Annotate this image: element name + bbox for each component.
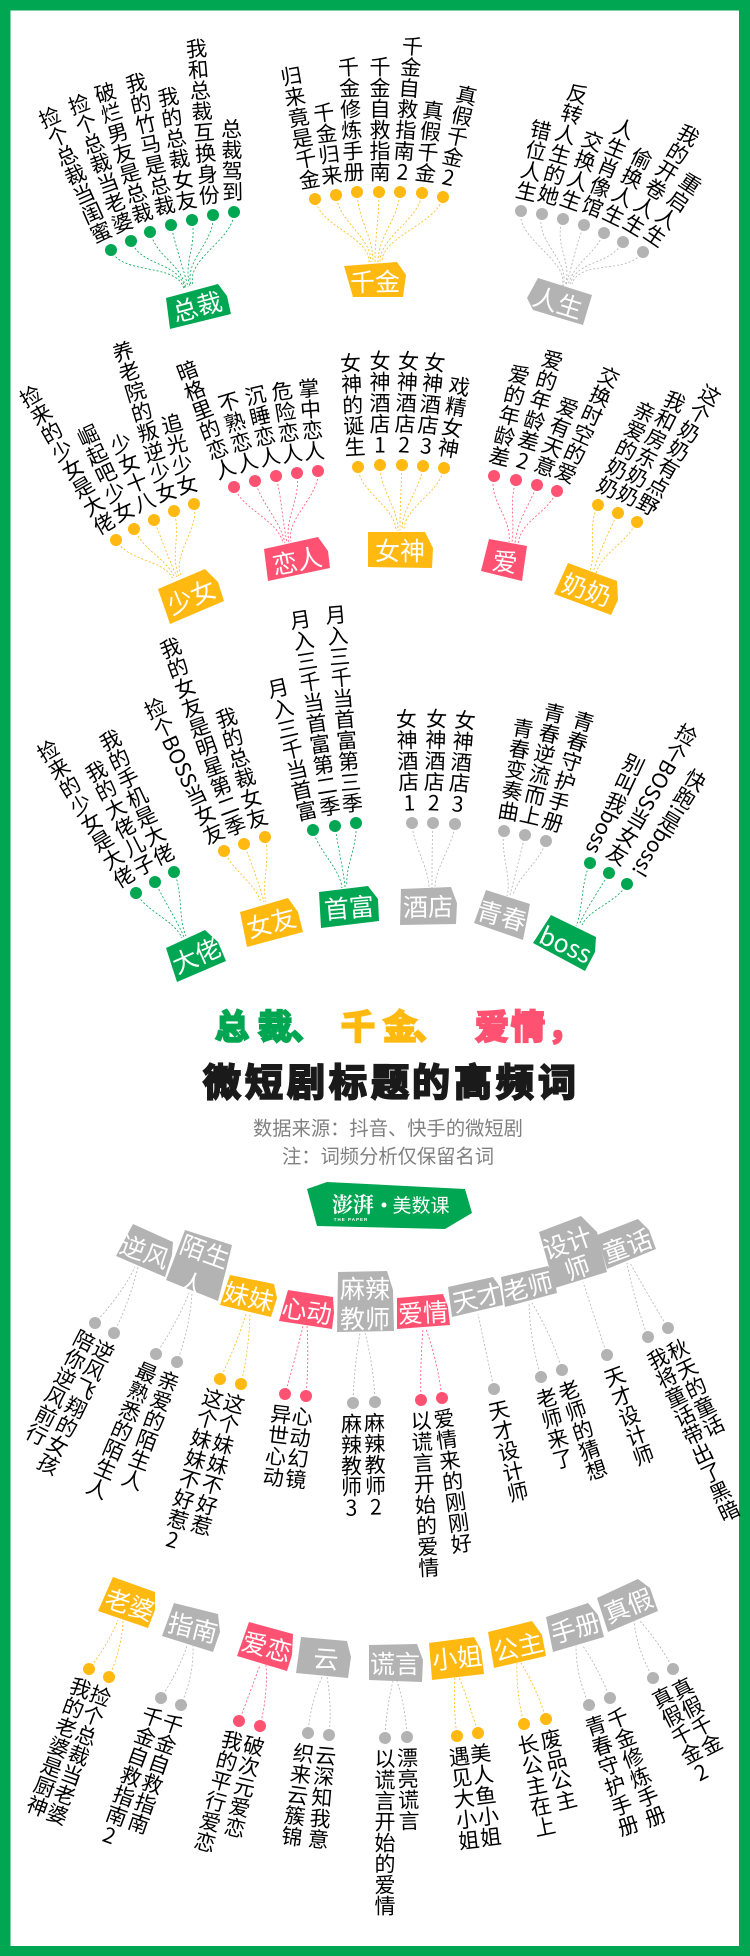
dots: 人生: [515, 205, 649, 258]
titles: 少女: 养老院的叛逆少女: [106, 337, 184, 507]
titles: 奶奶: 这个奶奶有点野: [630, 378, 728, 522]
titles: 爱情: [406, 1406, 478, 1579]
cluster: 设计师: [537, 1216, 661, 1471]
titles: 女神: 女神酒店1: [365, 350, 395, 455]
connectors: 手册: [576, 1646, 610, 1705]
tag: 天才: 天才: [449, 1274, 505, 1320]
cluster: 公主: [488, 1621, 583, 1840]
connectors: 小姐: [454, 1677, 478, 1736]
titles: 爱: 爱的年龄差2: [505, 346, 570, 475]
titles: 女友: 捡个BOSS当女友: [137, 692, 232, 850]
tag: 童话: 童话: [597, 1220, 657, 1270]
titles: 女神: 女神酒店3: [410, 350, 451, 458]
cluster: 谎言: [369, 1644, 424, 1916]
titles: 首富: 月入三千当首富第三季: [320, 603, 368, 815]
cluster: 老师: [499, 1262, 614, 1485]
titles: 恋人: 危险恋人: [266, 378, 308, 466]
titles: 酒店: 女神酒店2: [418, 708, 452, 814]
titles: 真假: 真假千金: [665, 1672, 729, 1760]
title line 1: 总裁、: [215, 1000, 324, 1049]
cluster: 青春: [473, 699, 601, 940]
data source note: 数据来源：抖音、快手的微短剧: [253, 1113, 523, 1141]
titles: 手册: 青春守护手册: [578, 1711, 646, 1840]
dots: 大佬: [130, 866, 180, 899]
titles: 童话: 秋天的童话: [660, 1333, 732, 1442]
tag: 爱: 爱: [490, 541, 520, 581]
tag: 真假: 真假: [598, 1579, 658, 1631]
titles: 爱: 交换时空的爱: [548, 361, 627, 489]
cluster: 天才: [448, 1274, 535, 1506]
titles: 爱恋: 破次元爱恋: [218, 1732, 271, 1842]
titles: 千金: 千金归来: [308, 100, 348, 188]
titles: 大佬: 我的大佬儿子: [78, 755, 162, 881]
cluster: 恋人: [169, 355, 330, 582]
titles: 千金: 真假千金: [409, 98, 449, 185]
titles: 女神: 戏精女神: [432, 373, 476, 461]
dots: 谎言: [379, 1731, 413, 1744]
titles: 青春: [492, 699, 601, 837]
titles: 云: [276, 1741, 342, 1851]
tag: 青春: 青春: [473, 891, 531, 939]
dots: 爱情: [415, 1392, 448, 1406]
connectors: 麻辣教师: [353, 1333, 375, 1403]
titles: 女神: 女神的诞生: [335, 351, 370, 458]
connector: 设计师: [583, 1282, 607, 1355]
titles: 爱情: 爱情来的刚刚好: [428, 1406, 478, 1556]
connector: 天才: [478, 1314, 494, 1389]
cluster: boss: [533, 718, 714, 971]
titles: 老婆: 我的老婆是厨神: [20, 1673, 98, 1822]
title line 1: 爱情，: [475, 1000, 582, 1049]
titles: 逆风: 陪你逆风前行: [18, 1324, 102, 1451]
cluster: 爱: [481, 346, 627, 581]
connectors: 陌生人: [156, 1293, 192, 1362]
dot: 设计师: [601, 1349, 613, 1361]
tag: 小姐: 小姐: [430, 1636, 484, 1678]
titles: 云: 云深知我意: [302, 1744, 342, 1851]
titles: 恋人: [169, 355, 330, 484]
tag: 老师: 老师: [499, 1262, 557, 1310]
titles: 千金: 真假千金2: [431, 82, 484, 191]
tag: 谎言: 谎言: [370, 1645, 420, 1681]
logo: 澎湃·美数课: ·: [374, 1191, 394, 1218]
tag: 女神: 女神: [375, 532, 425, 568]
connectors: 总裁: [111, 212, 234, 289]
cluster: 陌生人: [79, 1226, 235, 1504]
titles: 人生: 人生肖像馆: [575, 113, 642, 222]
dots: 恋人: [228, 465, 324, 493]
dots: 女友: [218, 831, 271, 857]
tag: 大佬: 大佬: [166, 928, 226, 982]
tag: 麻辣教师: [337, 1270, 394, 1336]
titles: 人生: 反转人生的她: [531, 79, 595, 209]
tag: 恋人: 恋人: [269, 538, 325, 582]
connectors: 爱恋: [239, 1665, 266, 1726]
titles: 女友: [137, 633, 275, 850]
titles: 恋人: 沉睡恋人: [238, 381, 286, 470]
dots: 爱恋: [233, 1715, 266, 1732]
titles: 酒店: 女神酒店1: [391, 708, 425, 814]
titles: 总裁: 破烂男友是总裁: [88, 78, 160, 228]
cluster: 小姐: [429, 1636, 507, 1852]
dots: 小姐: [451, 1727, 484, 1742]
titles: 人生: 我的开卷人生: [616, 118, 707, 242]
titles: 总裁: 捡个总裁当闺蜜: [32, 101, 119, 248]
connectors: 千金: [315, 192, 443, 262]
cluster: 千金: [275, 34, 484, 299]
dots: 老婆: [83, 1663, 115, 1683]
tag: 陌生人: 陌生: [175, 1226, 235, 1276]
titles: 童话: 我将童话带出了黑暗: [640, 1342, 747, 1527]
titles: 总裁: 我和总裁互换身份: [181, 37, 225, 207]
cluster: 总裁: [32, 37, 248, 330]
titles: 恋人: 掌中恋人: [293, 376, 330, 463]
logo: 澎湃·美数课: 澎湃: [332, 1189, 374, 1219]
titles: 首富: 月入三千当首富: [261, 674, 324, 825]
titles: 心动: [257, 1402, 318, 1491]
data source note: [253, 1113, 523, 1169]
titles: 大佬: 我的手机是大佬: [92, 724, 182, 871]
titles: 麻辣教师: 麻辣教师2: [359, 1412, 391, 1517]
tag: 千金: 千金: [350, 263, 400, 299]
cluster: 真假: [597, 1579, 729, 1788]
dots: 酒店: [406, 817, 461, 830]
connectors: 心动: [285, 1326, 308, 1396]
cluster: 爱恋: [188, 1622, 296, 1856]
connectors: 老婆: [89, 1620, 123, 1677]
connectors: 奶奶: [590, 505, 637, 573]
tag: 爱: [481, 539, 527, 581]
titles: 青春: 青春逆流而上: [514, 699, 571, 829]
connectors: 指南: [161, 1646, 193, 1705]
connectors: 酒店: [412, 823, 455, 888]
cluster: 童话: [597, 1219, 747, 1527]
connectors: 爱: [493, 476, 557, 544]
title line 1: 千金、: [341, 1000, 447, 1049]
titles: 指南: 千金自救指南: [121, 1709, 191, 1838]
titles: 老师: 老师的猜想: [551, 1376, 614, 1485]
dots: 陌生人: [150, 1348, 183, 1368]
titles: 千金: [275, 34, 484, 192]
titles: 麻辣教师: 麻辣教师3: [336, 1413, 366, 1518]
tag: 逆风: 逆风: [115, 1226, 175, 1276]
logo: 澎湃·美数课: 美数课: [392, 1191, 450, 1218]
cluster: 酒店: [391, 708, 481, 925]
titles: 总裁: 我的竹马是总裁: [119, 69, 182, 220]
titles: 千金: 千金自救指南: [365, 56, 395, 182]
titles: 少女: 少女十八: [103, 428, 162, 517]
connectors: 少女: [116, 504, 195, 579]
titles: 爱: [483, 346, 627, 489]
tag: 云: [296, 1637, 351, 1678]
connectors: 真假: [634, 1621, 673, 1678]
dots: 手册: [583, 1692, 616, 1711]
titles: 手册: 千金修炼手册: [600, 1703, 673, 1832]
cluster: 手册: [546, 1603, 673, 1840]
connectors: boss: [576, 863, 627, 926]
connectors: 大佬: [136, 872, 186, 938]
connectors: 谎言: [385, 1681, 407, 1738]
titles: 人生: 偷换人生: [596, 142, 660, 231]
titles: 老婆: 捡个总裁当老婆: [40, 1681, 118, 1830]
cluster: 少女: [12, 337, 224, 624]
titles: 真假: 真假千金2: [645, 1681, 719, 1788]
titles: boss: 别叫我boss: [579, 749, 652, 860]
titles: 首富: [261, 603, 368, 825]
connectors: 云: [308, 1677, 330, 1735]
dots: 青春: [498, 825, 552, 847]
data source note: 注：词频分析仅保留名词: [282, 1141, 494, 1169]
title: 天才: 天才设计师: [482, 1396, 535, 1506]
titles: 大佬: 捡来的少女是大佬: [30, 734, 142, 894]
titles: 总裁: [32, 37, 248, 248]
connectors: 首富: [313, 823, 356, 888]
titles: 青春: 青春变奏曲: [492, 715, 540, 824]
cluster: 妹妹: [155, 1273, 277, 1554]
tag: 陌生人: 人: [174, 1262, 210, 1304]
dots: 少女: [110, 498, 200, 546]
cluster: 女神: [335, 349, 476, 568]
tag: 妹妹: 妹妹: [221, 1273, 277, 1319]
tag: 爱恋: 爱恋: [238, 1622, 296, 1670]
titles: 恋人: 暗格里的恋人: [169, 355, 243, 484]
titles: 爱: 爱有天意: [527, 392, 586, 482]
titles: 爱: 爱的年龄差: [483, 361, 536, 470]
logo: 澎湃·美数课: [307, 1182, 472, 1229]
dots: 女神: [352, 459, 450, 474]
connectors: 青春: [503, 831, 546, 896]
tag: 心动: 心动: [279, 1288, 335, 1332]
titles: 千金: 归来竟是千金: [275, 63, 326, 192]
dots: 心动: [279, 1388, 312, 1402]
dots: 奶奶: [592, 499, 643, 528]
connectors: 人生: [521, 211, 643, 286]
titles: boss: 快跑!是boss!: [625, 763, 714, 883]
logo: 澎湃·美数课: THE PAPER: [334, 1217, 368, 1222]
connectors: 女友: [224, 837, 267, 903]
dots: 逆风: [89, 1317, 120, 1339]
titles: 妹妹: 这个妹妹不好惹2: [155, 1384, 230, 1554]
titles: 恋人: 不熟恋人: [211, 387, 265, 476]
titles: 女神: [335, 349, 476, 461]
titles: 谎言: 以谎言开始的爱情: [370, 1748, 400, 1916]
tag: 女友: 女友: [242, 898, 300, 946]
tag: 设计师: 设计: [537, 1217, 597, 1267]
titles: 少女: 崛起吧少女: [70, 419, 142, 528]
titles: 人生: 重启人生: [637, 166, 709, 253]
titles: 大佬: [30, 724, 182, 894]
titles: 心动: 心动幻镜: [280, 1404, 318, 1491]
dots: 真假: [647, 1663, 679, 1684]
titles: 酒店: 女神酒店3: [442, 708, 481, 815]
titles: 陌生人: 亲爱的陌生人: [115, 1366, 186, 1494]
connectors: 恋人: [234, 471, 318, 543]
titles: 麻辣教师: [336, 1412, 391, 1518]
titles: 谎言: 漂亮谎言: [392, 1747, 424, 1832]
dot: 天才: [488, 1383, 500, 1395]
connectors: 童话: [627, 1263, 668, 1337]
titles: 千金: 千金修炼手册: [333, 56, 369, 183]
cluster: 指南: [92, 1603, 222, 1850]
titles: 公主: [511, 1725, 583, 1840]
dots: boss: [584, 857, 633, 890]
title line 2: 微短剧标题的高频词: [203, 1052, 576, 1107]
cluster: 云: [276, 1637, 351, 1851]
titles: 云: 织来云簇锦: [276, 1741, 320, 1849]
titles: 酒店: [391, 708, 481, 815]
titles: 爱恋: 我的平行爱恋: [188, 1726, 249, 1856]
dots: 老师: [535, 1364, 568, 1383]
tag: 老婆: 老婆: [101, 1579, 159, 1629]
titles: 逆风: 逆风飞翔的女孩: [30, 1335, 122, 1480]
tag: 设计师: 师: [559, 1246, 595, 1288]
cluster: 逆风: [18, 1224, 175, 1480]
cluster: 首富: [261, 603, 379, 928]
tag: 总裁: 总裁: [168, 282, 226, 330]
connectors: 女神: [358, 465, 444, 531]
cluster: 人生: [510, 79, 709, 327]
heading: [203, 1000, 582, 1107]
cluster: 爱情: [397, 1293, 478, 1579]
tag: 酒店: 酒店: [403, 888, 453, 924]
titles: 谎言: [370, 1747, 424, 1916]
titles: 指南: 千金自救指南2: [92, 1702, 170, 1850]
titles: 奶奶: 亲爱的奶奶: [590, 396, 663, 503]
connectors: 老师: [529, 1303, 562, 1377]
titles: 奶奶: 我和房东奶奶: [610, 385, 693, 512]
cluster: 大佬: [30, 724, 226, 982]
titles: 少女: 追光少女: [155, 410, 204, 499]
titles: 人生: 交换人生: [553, 126, 610, 215]
titles: 公主: 废品公主: [534, 1725, 583, 1814]
dots: 麻辣教师: [347, 1396, 381, 1409]
connectors: 妹妹: [220, 1314, 250, 1384]
titles: 小姐: [443, 1741, 507, 1852]
dots: 童话: [642, 1322, 674, 1343]
titles: 老师: 老师来了: [529, 1384, 580, 1473]
titles: 青春: 青春守护手册: [535, 707, 601, 837]
titles: 女友: 我的女友是明星第二季: [153, 633, 253, 841]
tag: 指南: 指南: [164, 1603, 222, 1651]
tag: 陌生人: [166, 1226, 235, 1304]
dots: 爱: [488, 470, 563, 497]
dots: 妹妹: [214, 1373, 247, 1390]
titles: 女友: 我的总裁女友: [209, 703, 275, 833]
cluster: 老婆: [20, 1577, 159, 1830]
tag: 爱情: 爱情: [397, 1293, 449, 1331]
tag: 云: 云: [312, 1639, 340, 1677]
connectors: 公主: [517, 1663, 546, 1724]
titles: 心动: 异世心动: [257, 1402, 297, 1489]
titles: 少女: 捡来的少女是大佬: [12, 379, 122, 540]
titles: 总裁: 总裁驾到: [216, 118, 248, 202]
titles: 女神: 女神酒店2: [389, 349, 424, 456]
titles: 首富: 月入三千当首富第二季: [284, 607, 346, 819]
titles: 妹妹: 这个妹妹不好惹: [184, 1389, 251, 1540]
title: 设计师: 天才设计师: [597, 1361, 661, 1471]
titles: 小姐: 美人鱼小姐: [464, 1741, 507, 1849]
titles: 人生: 错位人生: [510, 116, 558, 205]
dots: 公主: [518, 1713, 552, 1730]
tag: 公主: 公主: [490, 1623, 546, 1669]
tag: boss: boss: [534, 917, 598, 971]
titles: 小姐: 遇见大小姐: [443, 1744, 485, 1852]
titles: 千金: 千金自救指南2: [387, 34, 428, 183]
tag: 麻辣教师: 教师: [340, 1300, 390, 1336]
connectors: 爱情: [421, 1329, 442, 1400]
tag: 少女: 少女: [161, 570, 221, 622]
connectors: 逆风: [95, 1267, 138, 1333]
dots: 云: [302, 1727, 335, 1741]
tag: 设计师: [537, 1216, 607, 1288]
dots: 指南: [155, 1692, 187, 1711]
tag: 首富: 首富: [323, 887, 375, 927]
cluster: 女友: [137, 633, 303, 947]
cluster: 麻辣教师: [336, 1270, 394, 1518]
title line 1: [215, 1000, 582, 1049]
titles: boss: 捡个BOSS当女友: [599, 718, 705, 871]
cluster: 奶奶: [554, 378, 728, 615]
titles: 少女: [12, 337, 204, 540]
dots: 首富: [307, 817, 362, 836]
dots: 千金: [309, 186, 449, 205]
titles: 陌生人: 最熟悉的陌生人: [79, 1357, 165, 1504]
tag: 手册: 手册: [546, 1603, 604, 1651]
tag: 奶奶: 奶奶: [557, 564, 617, 614]
titles: 总裁: 捡个总裁当老婆: [61, 89, 140, 238]
titles: 公主: 长公主在上: [511, 1731, 562, 1840]
tag: 人生: 人生: [529, 277, 587, 327]
cluster: 心动: [257, 1288, 335, 1491]
titles: 总裁: 我的总裁女友: [152, 84, 203, 214]
titles: 人生: [510, 79, 709, 253]
tag: 麻辣教师: 麻辣: [340, 1270, 390, 1306]
titles: 爱情: 以谎言开始的爱情: [406, 1409, 444, 1579]
dots: 总裁: [105, 206, 240, 256]
